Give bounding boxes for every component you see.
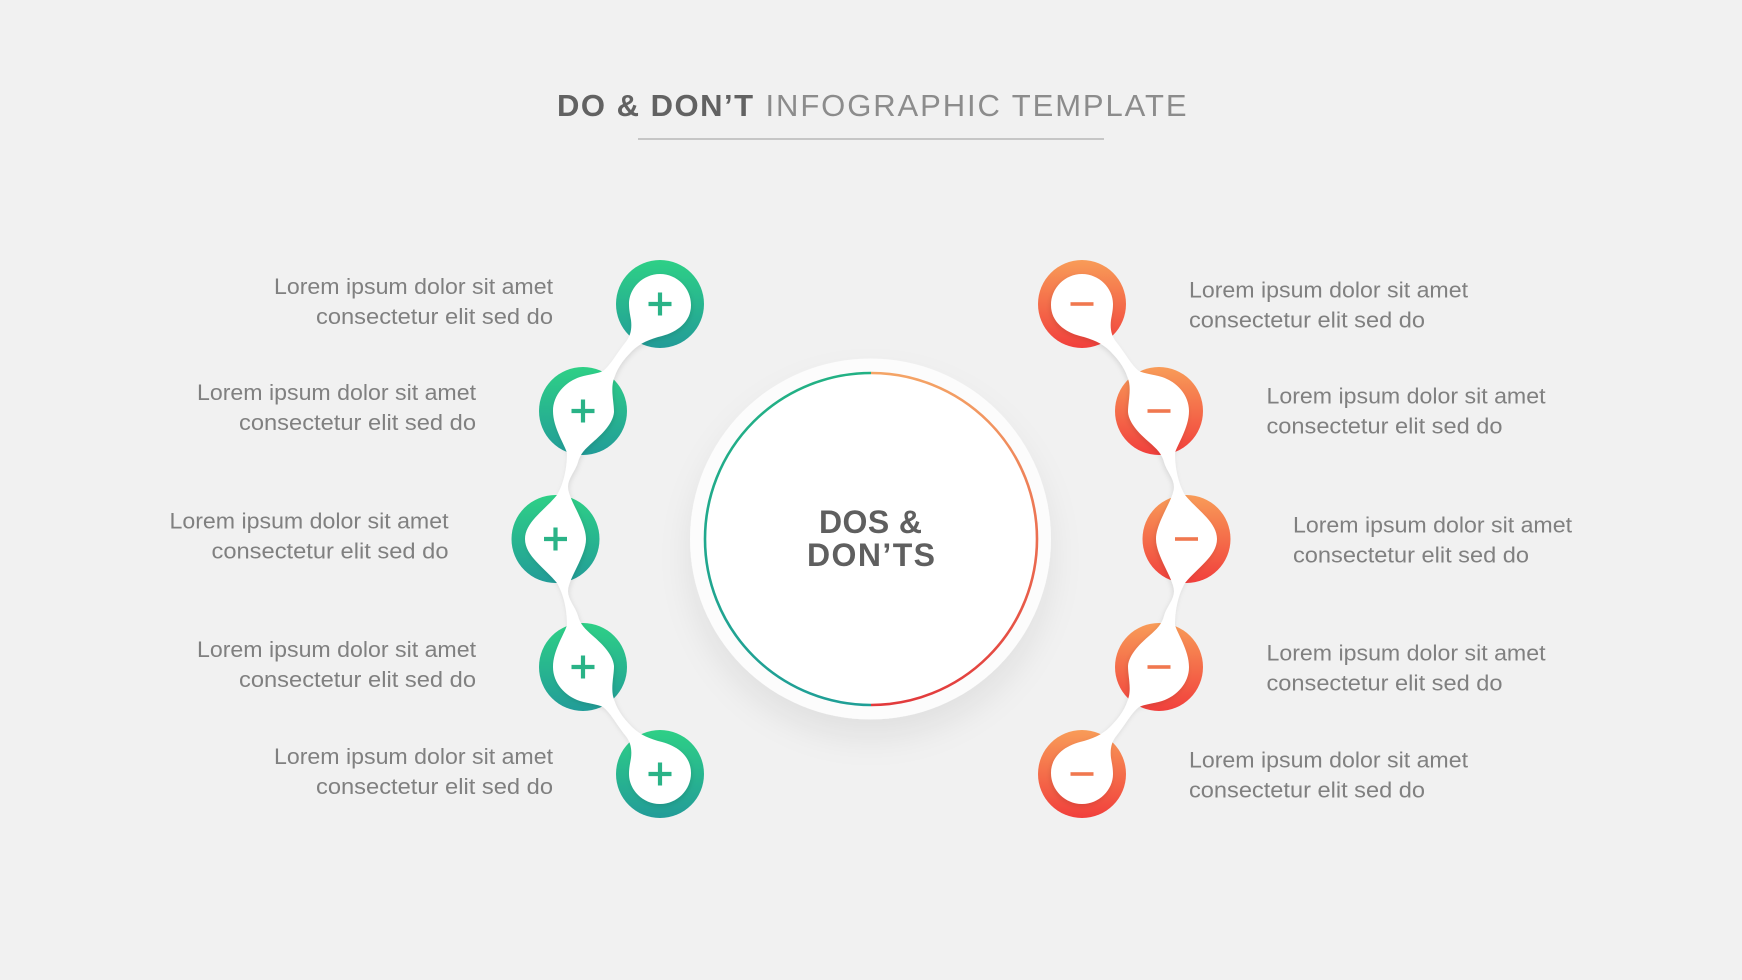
icon: plus 4 <box>572 656 595 679</box>
text: do 2: consectetur elit sed do <box>239 410 476 435</box>
do ring 1 <box>616 260 704 348</box>
center label <box>807 504 935 573</box>
text: do 5 <box>274 744 553 799</box>
text: do 3 <box>170 508 448 564</box>
text: don't 3 <box>1293 512 1572 568</box>
text: don't 1: Lorem ipsum dolor sit amet <box>1189 278 1468 302</box>
text: do 2: Lorem ipsum dolor sit amet <box>197 380 476 405</box>
don't ring 4 <box>1115 623 1203 711</box>
text: do 4: consectetur elit sed do <box>239 667 476 692</box>
white chain connector <box>525 274 691 804</box>
title <box>557 88 1186 123</box>
text: do 4: Lorem ipsum dolor sit amet <box>197 637 476 662</box>
text: do 5: Lorem ipsum dolor sit amet <box>274 744 553 769</box>
text: don't 4: consectetur elit sed do <box>1266 670 1502 696</box>
icon: minus 5 <box>1070 772 1094 776</box>
icon: plus 1 <box>648 292 672 316</box>
do ring 2 <box>539 367 627 455</box>
panel: central circle <box>690 358 1051 720</box>
text: do 3: consectetur elit sed do <box>212 538 448 564</box>
text: don't 2 <box>1266 384 1546 438</box>
don't ring 5 <box>1038 730 1126 818</box>
text: do 1 <box>274 274 553 329</box>
icon: plus 2 <box>572 400 595 422</box>
don't ring 2 <box>1115 367 1203 455</box>
icon: plus 5 <box>648 762 672 786</box>
center label: DON’TS <box>807 537 935 573</box>
icon: minus 3 <box>1175 537 1198 541</box>
text: don't 5: Lorem ipsum dolor sit amet <box>1189 748 1468 772</box>
text: don't 3: consectetur elit sed do <box>1293 542 1529 568</box>
title: INFOGRAPHIC TEMPLATE <box>766 88 1186 123</box>
icon: minus 2 <box>1148 409 1170 413</box>
text: don't 2: consectetur elit sed do <box>1266 414 1502 438</box>
text: do 3: Lorem ipsum dolor sit amet <box>170 508 448 534</box>
panel: don't chain <box>1038 260 1230 818</box>
text: don't 1: consectetur elit sed do <box>1189 308 1425 332</box>
text: do 1: Lorem ipsum dolor sit amet <box>274 274 553 299</box>
text: don't 4 <box>1266 640 1546 696</box>
icon: minus 4 <box>1148 665 1170 669</box>
text: do 5: consectetur elit sed do <box>316 774 553 799</box>
text: don't 2: Lorem ipsum dolor sit amet <box>1266 384 1546 408</box>
text: don't 5: consectetur elit sed do <box>1189 778 1425 802</box>
don't ring 3 <box>1142 495 1230 583</box>
title: DO & DON’T <box>557 88 753 123</box>
do ring 4 <box>539 623 627 711</box>
text: do 1: consectetur elit sed do <box>316 304 553 329</box>
icon: minus 1 <box>1070 302 1094 306</box>
text: do 4 <box>197 637 476 692</box>
do ring 3 <box>512 495 600 583</box>
text: do 2 <box>197 380 476 435</box>
don't ring 1 <box>1038 260 1126 348</box>
text: don't 5 <box>1189 748 1468 802</box>
icon: plus 3 <box>544 528 567 551</box>
do ring 5 <box>616 730 704 818</box>
white chain connector <box>1051 274 1217 804</box>
center label: DOS & <box>819 504 922 540</box>
text: don't 4: Lorem ipsum dolor sit amet <box>1266 640 1546 666</box>
panel: do chain <box>512 260 704 818</box>
text: don't 3: Lorem ipsum dolor sit amet <box>1293 512 1572 538</box>
text: don't 1 <box>1189 278 1468 332</box>
